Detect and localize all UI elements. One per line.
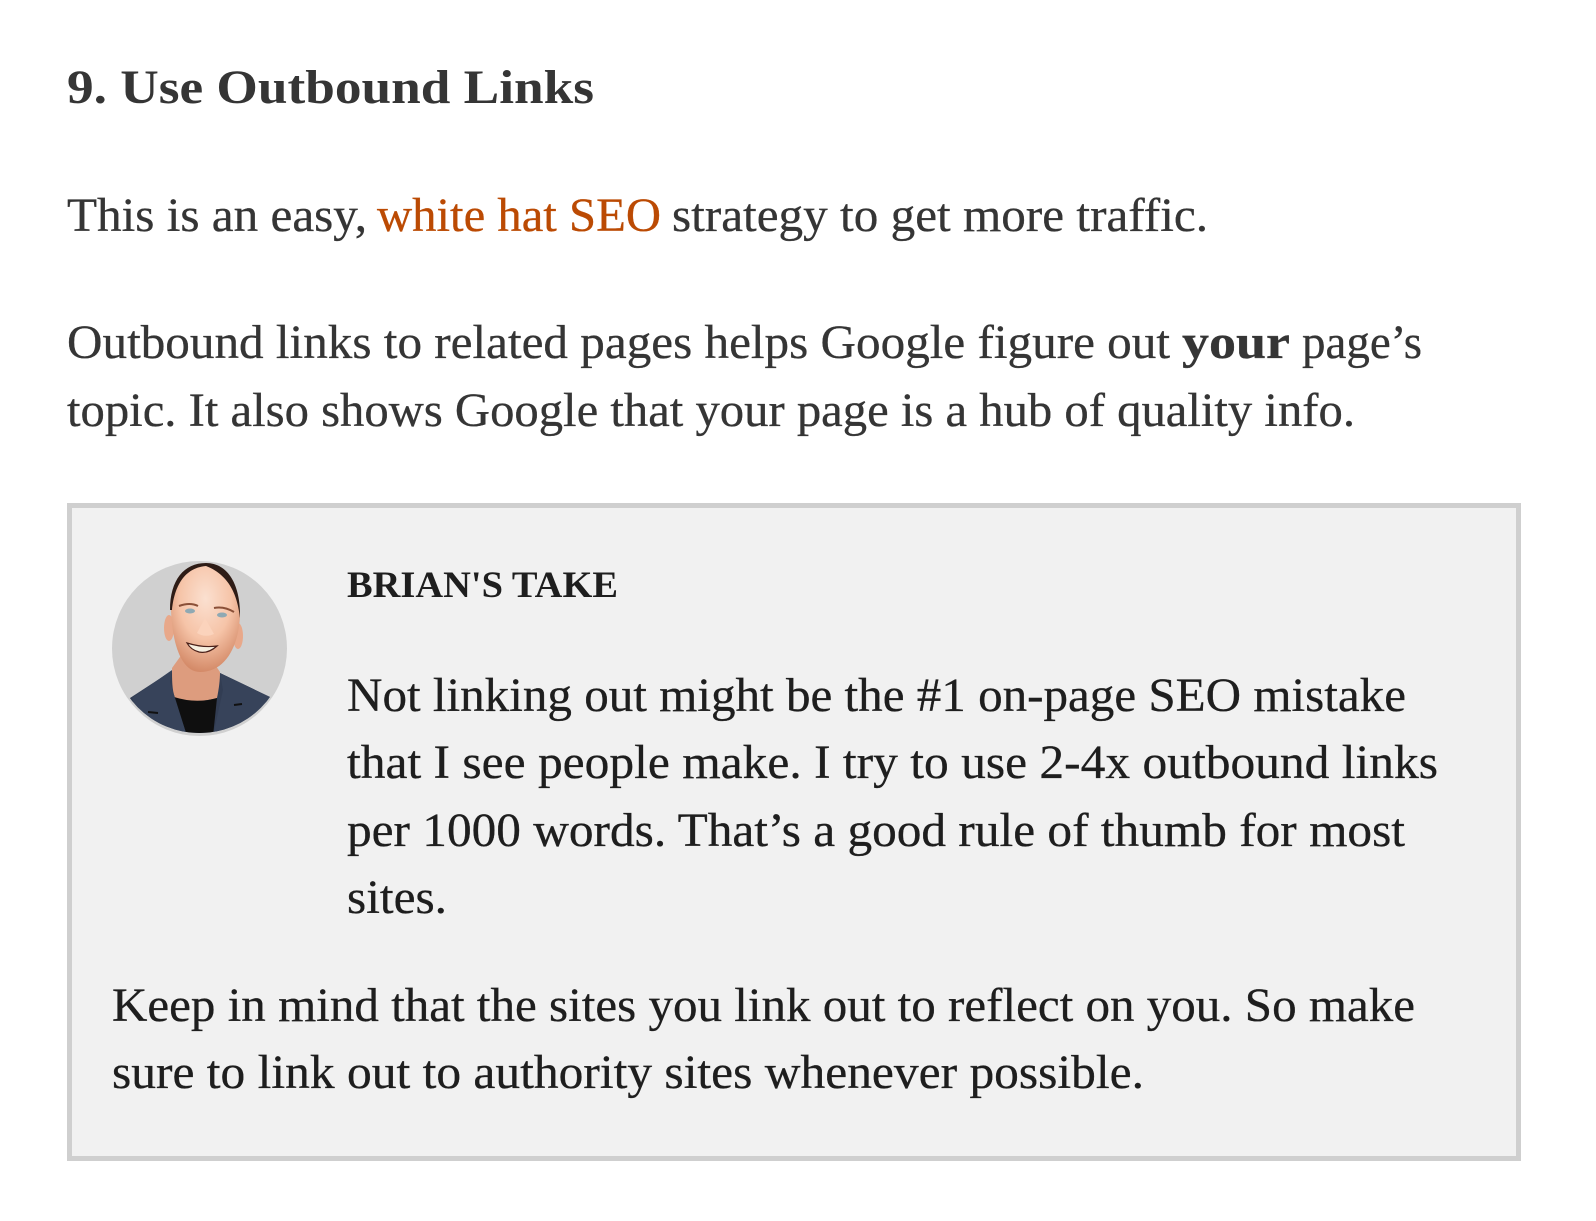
icon: portrait avatar xyxy=(112,561,287,740)
take paragraph 1: Not linking out might be the #1 on-page SEO mistake xyxy=(347,670,1406,722)
take paragraph 2: sure to link out to authority sites whenever possible. xyxy=(112,1047,1144,1099)
intro paragraph: strategy to get more traffic. xyxy=(672,190,1208,242)
intro paragraph xyxy=(67,190,1208,242)
take paragraph 1: sites. xyxy=(347,872,447,924)
link: white hat SEO: white hat SEO xyxy=(377,190,661,242)
explanation paragraph: topic. It also shows Google that your page is a hub of quality info. xyxy=(67,385,1355,437)
take paragraph 1 xyxy=(347,670,1438,924)
panel: Brian's take xyxy=(70,506,1518,1158)
take heading: BRIAN'S TAKE xyxy=(347,565,618,606)
take paragraph 2: Keep in mind that the sites you link out to reflect on you. So make xyxy=(112,980,1415,1032)
take paragraph 1: per 1000 words. That’s a good rule of thumb for most xyxy=(347,805,1405,857)
explanation paragraph: page’s xyxy=(1302,317,1422,369)
intro paragraph: This is an easy, xyxy=(67,190,367,242)
take paragraph 1: that I see people make. I try to use 2-4x outbound links xyxy=(347,737,1438,789)
take paragraph 2 xyxy=(112,980,1415,1099)
explanation paragraph xyxy=(67,317,1422,437)
heading: 9. Use Outbound Links xyxy=(67,61,594,114)
explanation paragraph: your xyxy=(1182,317,1290,369)
explanation paragraph: Outbound links to related pages helps Google figure out xyxy=(67,317,1170,369)
